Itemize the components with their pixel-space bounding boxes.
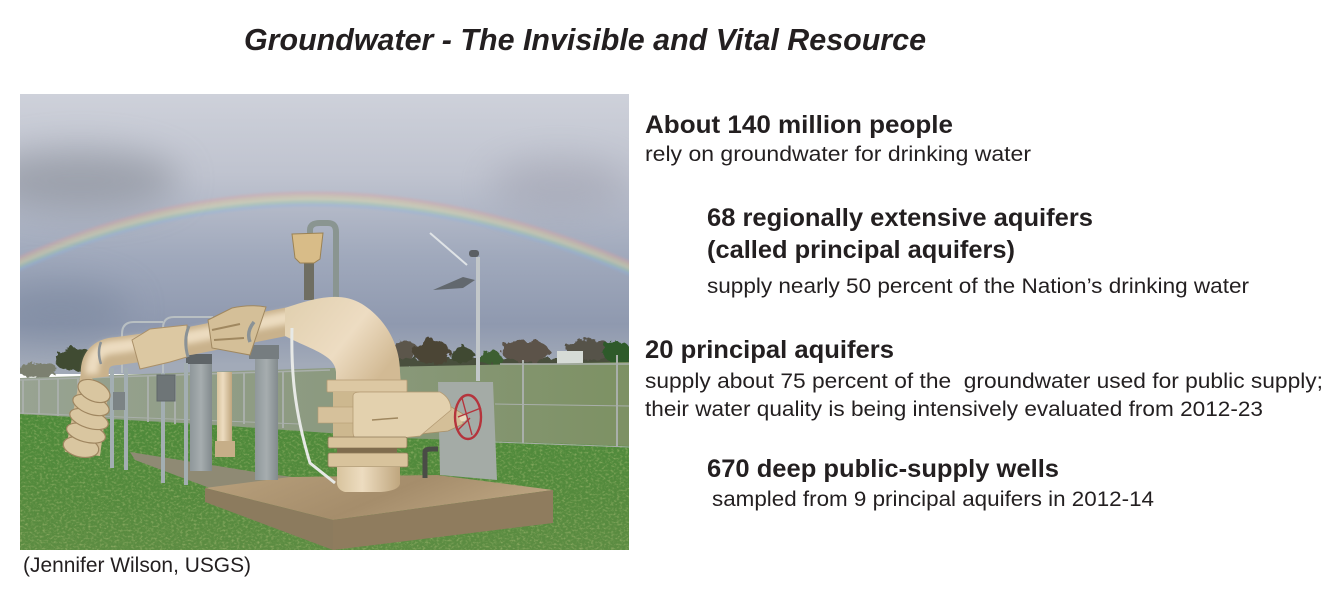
thin galvanized posts and conduit [112, 317, 213, 485]
fact: 670 deep wells: 670 deep public-supply wells [707, 455, 1059, 483]
valve body [318, 380, 466, 492]
hillside behind fence [20, 362, 629, 450]
tan support column [215, 372, 235, 457]
fact: 20 principal aquifers: their water quality is being intensively evaluated from 2012-23 [645, 397, 1263, 421]
photo credit: (Jennifer Wilson, USGS) [23, 553, 251, 577]
chain-link fence [20, 355, 629, 447]
fact: 670 deep wells [707, 455, 1154, 511]
corrugated lower pipe [62, 374, 111, 458]
fact: 68 principal aquifers: 68 regionally extensive aquifers [707, 204, 1093, 232]
horizontal main pipe [92, 306, 295, 378]
fact: 20 principal aquifers: 20 principal aquifers [645, 336, 894, 364]
rainbow [14, 193, 634, 276]
hose [292, 328, 335, 483]
sky with clouds [0, 94, 630, 374]
steel supports [186, 345, 279, 480]
grey control box [438, 382, 497, 480]
fact: 20 principal aquifers: supply about 75 percent of the groundwater used for public supply; [645, 369, 1323, 393]
fact: 20 principal aquifers [645, 336, 1323, 421]
concrete walkway [130, 452, 292, 488]
red valve wheel [455, 395, 481, 439]
black pipe fitting [425, 449, 438, 478]
air valve and gooseneck [292, 223, 336, 300]
fact: 140 million people: rely on groundwater for drinking water [645, 142, 1031, 166]
fact: 68 principal aquifers: supply nearly 50 percent of the Nation’s drinking water [707, 274, 1249, 298]
antenna mast and solar panel [430, 233, 480, 381]
fact: 140 million people [645, 111, 1031, 166]
grass [20, 414, 629, 550]
concrete slab [205, 475, 553, 550]
title: Groundwater - The Invisible and Vital Resource [244, 22, 926, 57]
white building [557, 351, 583, 364]
fact: 670 deep wells: sampled from 9 principal aquifers in 2012-14 [712, 487, 1154, 511]
tree line [18, 340, 631, 378]
elbow pipe [285, 297, 401, 385]
photo: groundwater pipeline under a rainbow [0, 94, 634, 550]
fact: 140 million people: About 140 million people [645, 111, 953, 139]
fact: 68 principal aquifers: (called principal aquifers) [707, 236, 1015, 264]
fact: 68 principal aquifers [707, 204, 1249, 298]
